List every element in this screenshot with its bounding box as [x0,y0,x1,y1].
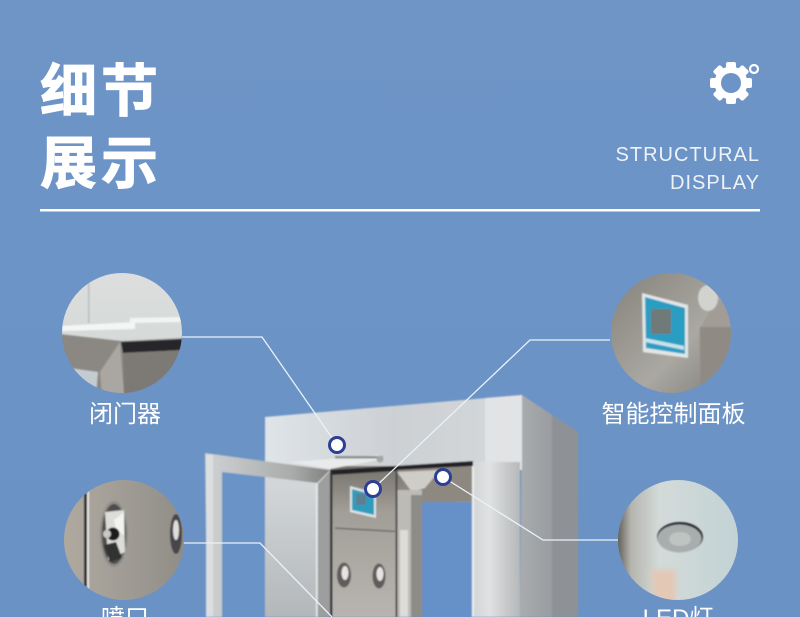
photo circle: LED light [616,478,740,604]
title: 展示 [40,132,162,196]
interior [330,466,473,617]
header light bay [485,395,522,470]
subtitle: STRUCTURAL [616,144,760,166]
photo circle: control panel [609,271,733,395]
nozzles [337,562,386,588]
header rule [40,209,760,212]
photo circle: door closer [60,271,184,395]
title [40,60,162,196]
machine side [520,395,578,617]
subtitle: DISPLAY [670,172,760,194]
title: 细节 [40,60,162,124]
open door [205,453,330,617]
ceiling interior [396,466,472,503]
marker: LED [436,470,450,484]
subtitle [616,144,760,194]
inner column [396,490,422,617]
marker: panel [366,482,380,496]
photo circle: nozzle [62,478,186,602]
wall seam [335,527,395,532]
marker: closer [330,438,344,452]
door closer arm [290,455,384,469]
right pillar [473,462,520,617]
opening [422,502,472,617]
air shower machine [205,395,578,617]
icon: gear [710,62,758,104]
ceiling highlight [397,470,440,492]
left front face [265,468,330,617]
side band [552,415,578,617]
control panel [350,486,376,518]
reflection [650,570,676,604]
label: control panel: 智能控制面板 [602,401,746,428]
door header dark strip [330,461,473,475]
callout lines [182,337,618,617]
label: door closer: 闭门器 [89,401,161,428]
machine front top [265,395,522,475]
